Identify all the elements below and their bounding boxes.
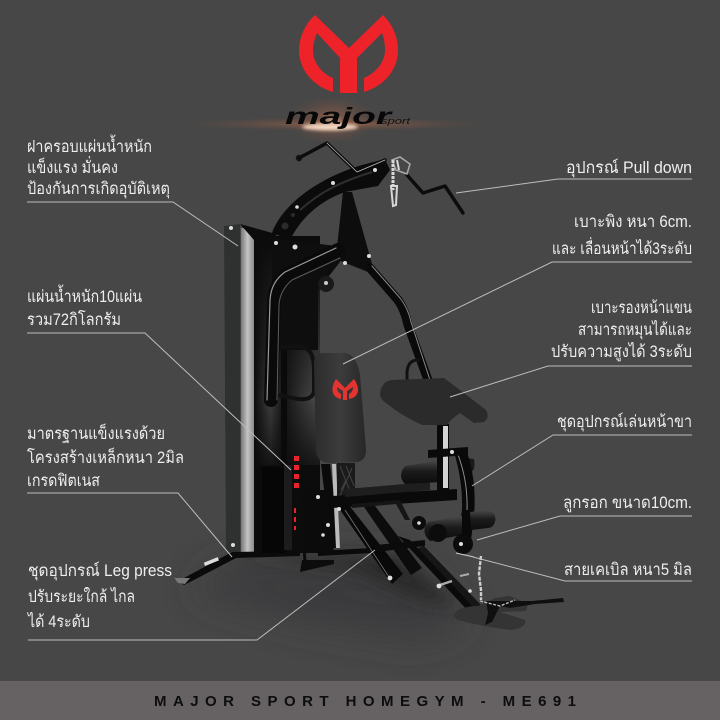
callout: pull down — [456, 158, 692, 193]
forearm pad — [380, 378, 488, 492]
upright column — [224, 224, 276, 552]
callout: steel frame: มาตรฐานแข็งแรงด้วย — [27, 423, 165, 443]
leg press beams — [337, 500, 482, 613]
callout: steel frame — [27, 423, 232, 557]
callout: roller: ลูกรอก ขนาด10cm. — [563, 494, 692, 513]
cable and chain — [456, 553, 481, 600]
callout: forearm pad — [450, 299, 692, 397]
handle loop — [278, 346, 314, 399]
floor shadow — [190, 556, 470, 640]
red selector pins — [294, 456, 299, 530]
lower frame — [298, 482, 457, 572]
callout: forearm pad: ปรับความสูงได้ 3ระดับ — [551, 342, 692, 362]
logo: red emblem — [299, 15, 398, 93]
callout: cable — [473, 557, 692, 581]
logo wordmark: major sport: major — [285, 103, 393, 129]
top arm — [272, 159, 390, 240]
callout: steel frame: โครงสร้างเหล็กหนา 2มิล — [27, 447, 184, 467]
callout: seat back — [343, 213, 692, 364]
upper frame bracket — [272, 192, 372, 350]
callout: top cover — [27, 134, 238, 246]
main curved tubes — [267, 248, 430, 400]
logo wordmark: major sport: sport — [381, 116, 411, 126]
callout: top cover: แข็งแรง มั่นคง — [27, 156, 118, 177]
icon: pad logo — [332, 379, 358, 400]
leg extension arm — [428, 447, 475, 540]
forearm pad support — [407, 360, 420, 385]
callout: leg press: ได้ 4ระดับ — [26, 612, 90, 631]
base foot — [174, 543, 300, 585]
pull-down chain — [391, 157, 410, 206]
callout: forearm pad: เบาะรองหน้าแขน — [591, 299, 692, 317]
callout: leg press — [26, 550, 375, 640]
back pad — [314, 353, 366, 463]
weight plate block — [262, 250, 292, 553]
callout: roller — [477, 494, 692, 540]
callout: cable: สายเคเบิล หนา5 มิล — [564, 561, 692, 579]
callout: steel frame: เกรดฟิตเนส — [27, 472, 100, 490]
foot pedal — [454, 596, 564, 630]
logo wordmark: major sport — [285, 103, 411, 129]
footer title: MAJOR SPORT HOMEGYM - ME691 — [154, 693, 576, 710]
callout: forearm pad: สามารถหมุนได้และ — [578, 320, 692, 340]
callout: leg extension — [472, 412, 692, 486]
callout: pull down: อุปกรณ์ Pull down — [566, 158, 692, 178]
home gym machine — [174, 143, 564, 630]
callout: seat back: และ เลื่อนหน้าได้3ระดับ — [552, 237, 692, 258]
weight stack backing — [254, 236, 320, 553]
seat support — [321, 463, 355, 548]
callout: leg extension: ชุดอุปกรณ์เล่นหน้าขา — [557, 412, 692, 432]
callout: weight plates: รวม72กิโลกรัม — [27, 310, 121, 329]
callout: weight plates: แผ่นน้ำหนัก10แผ่น — [27, 284, 142, 306]
callout: leg press: ปรับระยะใกล้ ไกล — [28, 587, 135, 606]
callout: top cover: ป้องกันการเกิดอุบัติเหตุ — [27, 180, 170, 199]
footer bar — [0, 681, 720, 720]
callout: top cover: ฝาครอบแผ่นน้ำหนัก — [27, 134, 152, 156]
callout: leg press: ชุดอุปกรณ์ Leg press — [28, 561, 172, 581]
callout: weight plates — [27, 284, 291, 470]
foam roller lower — [412, 510, 495, 554]
foam roller upper — [401, 458, 474, 484]
callout: seat back: เบาะพิง หนา 6cm. — [574, 213, 692, 231]
pull-down bar — [296, 143, 463, 213]
logo glow — [185, 96, 485, 144]
